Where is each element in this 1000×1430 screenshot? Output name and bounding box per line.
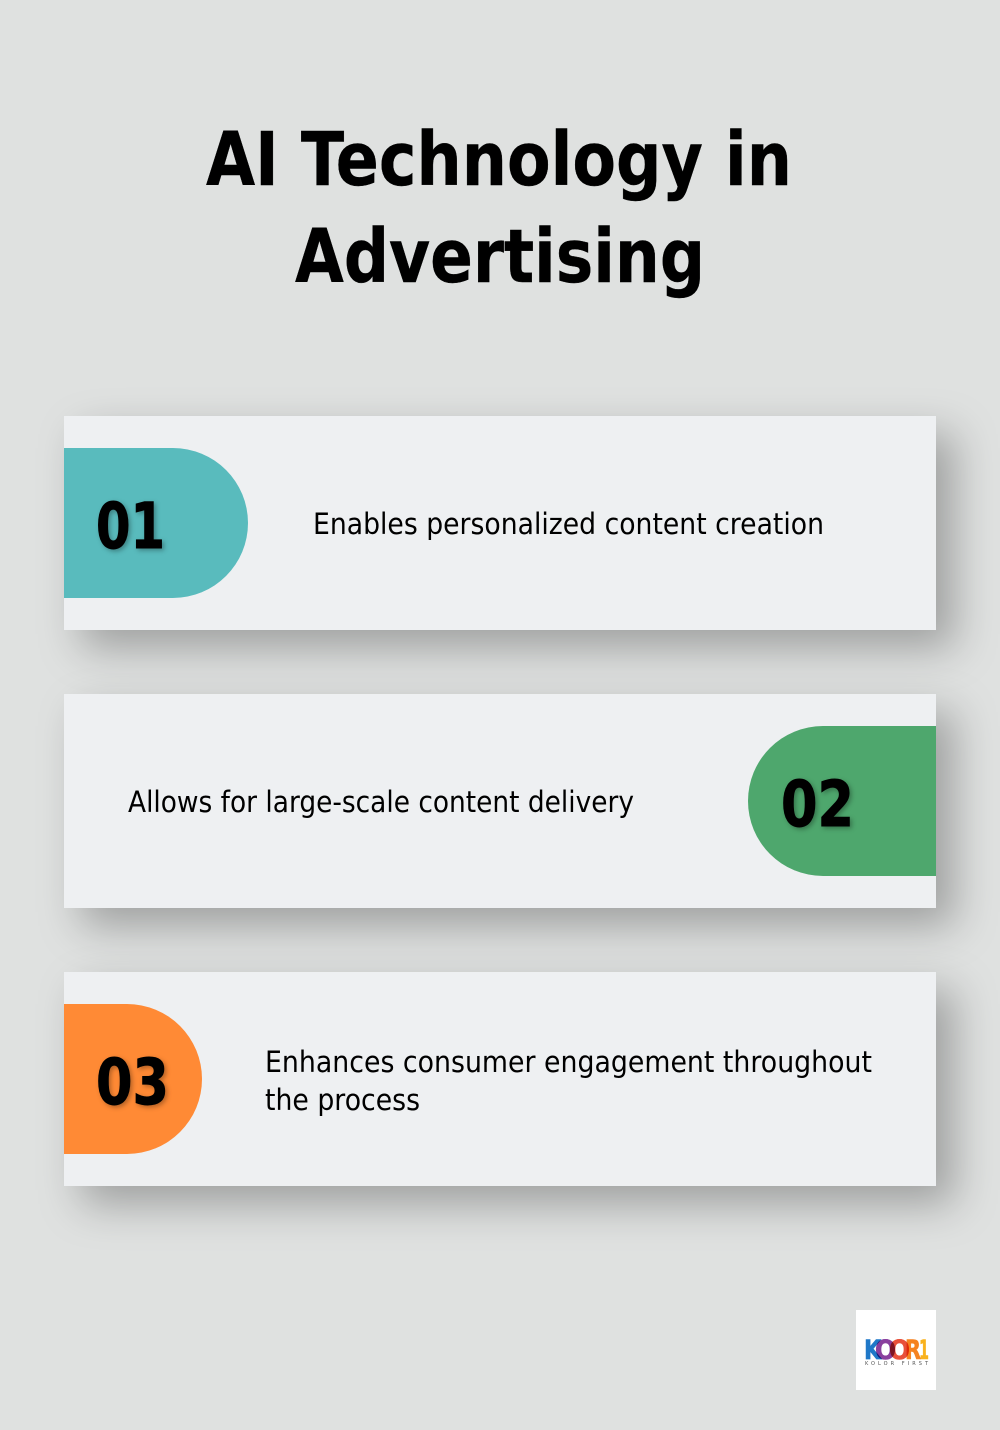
logo: Koor1 Kolor First: 1 xyxy=(919,1335,929,1366)
logo: Koor1 Kolor First: O xyxy=(889,1335,910,1366)
logo: Koor1 Kolor First: O xyxy=(875,1335,896,1366)
logo: Koor1 Kolor First: R xyxy=(905,1335,921,1366)
title xyxy=(206,117,792,300)
panel: step 03 xyxy=(64,972,936,1186)
badge: 03 xyxy=(64,1004,202,1154)
text: step 03 description xyxy=(265,1045,872,1117)
logo: Koor1 Kolor First xyxy=(856,1310,936,1390)
text: step 01 description: Enables personalized content creation xyxy=(313,507,824,541)
number: 02: 02 xyxy=(781,768,854,841)
panel: step 01 xyxy=(64,416,936,630)
panel: step 02 xyxy=(64,694,936,908)
title: Advertising xyxy=(295,214,705,300)
text: step 03 description: the process xyxy=(265,1083,420,1117)
number: 01: 01 xyxy=(96,490,165,563)
badge: 02 xyxy=(748,726,936,876)
title: AI Technology in xyxy=(206,117,792,203)
number: 03: 03 xyxy=(96,1046,169,1119)
logo: Koor1 Kolor First: K xyxy=(864,1335,882,1366)
badge: 01 xyxy=(64,448,248,598)
logo: Koor1 Kolor First: KOLOR FIRST xyxy=(865,1361,929,1367)
text: step 03 description: Enhances consumer engagement throughout xyxy=(265,1045,872,1079)
text: step 02 description: Allows for large-scale content delivery xyxy=(128,785,634,819)
